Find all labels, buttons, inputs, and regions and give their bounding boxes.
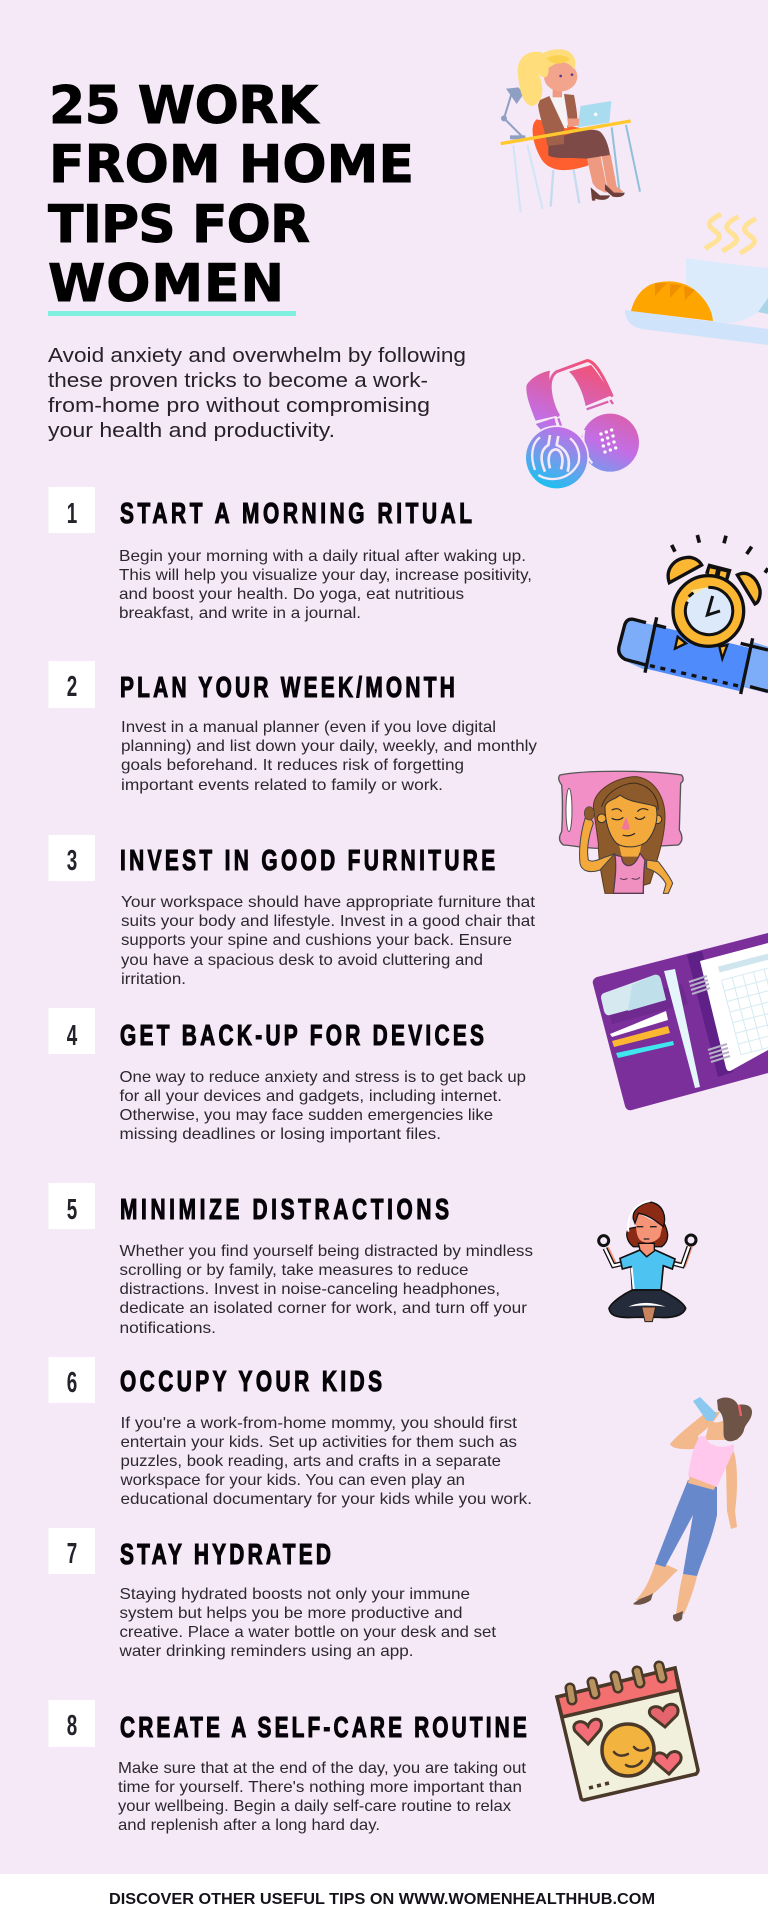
- icon: purple planner: [593, 933, 768, 1110]
- body 2: Invest in a manual planner (even if you love digital: [121, 719, 496, 736]
- number 8: 8: [67, 1710, 77, 1742]
- body 4: missing deadlines or losing important files.: [120, 1126, 441, 1143]
- title: FROM HOME: [49, 135, 414, 195]
- heading 3: INVEST IN GOOD FURNITURE: [120, 845, 495, 877]
- body 6: If you're a work-from-home mommy, you should first: [120, 1415, 518, 1432]
- body 3: suits your body and lifestyle. Invest in a good chair that: [121, 913, 536, 930]
- number box 5: [48, 1183, 95, 1229]
- title: TIPS FOR: [48, 195, 310, 255]
- number box 7: [48, 1528, 95, 1574]
- number 6: 6: [67, 1367, 77, 1399]
- icon: breakfast plate with bread and steaming cup: [625, 214, 768, 345]
- number 3: 3: [67, 845, 77, 877]
- title: [48, 76, 414, 314]
- tip 5: [48, 1183, 533, 1337]
- body 3: irritation.: [121, 971, 186, 988]
- body 5: distractions. Invest in noise-canceling headphones,: [120, 1281, 500, 1298]
- tip 8: [48, 1700, 527, 1834]
- body 6: puzzles, book reading, arts and crafts in a separate: [120, 1453, 501, 1470]
- body 3: [121, 894, 536, 988]
- number 1: 1: [67, 498, 77, 530]
- body 8: your wellbeing. Begin a daily self-care routine to relax: [118, 1798, 511, 1815]
- body 7: creative. Place a water bottle on your desk and set: [120, 1624, 497, 1641]
- footer text: DISCOVER OTHER USEFUL TIPS ON WWW.WOMENHEALTHHUB.COM: [109, 1891, 655, 1908]
- intro text: these proven tricks to become a work-: [48, 369, 428, 392]
- body 5: [120, 1243, 533, 1337]
- icon: woman lying on pillow: [559, 771, 683, 893]
- body 1: and boost your health. Do yoga, eat nutritious: [119, 586, 464, 603]
- number 5: 5: [67, 1194, 77, 1226]
- body 1: breakfast, and write in a journal.: [119, 605, 361, 622]
- body 2: [121, 719, 537, 794]
- tip 7: [48, 1528, 497, 1660]
- body 7: water drinking reminders using an app.: [118, 1643, 414, 1660]
- body 5: scrolling or by family, take measures to reduce: [120, 1262, 469, 1279]
- body 6: [119, 1415, 532, 1508]
- icon: meditating woman: [599, 1201, 696, 1322]
- tip 6: [48, 1357, 532, 1508]
- intro text: your health and productivity.: [48, 419, 335, 442]
- tip 4: [48, 1008, 526, 1143]
- heading 4: GET BACK-UP FOR DEVICES: [120, 1020, 484, 1052]
- body 6: entertain your kids. Set up activities for them such as: [120, 1434, 517, 1451]
- body 8: time for yourself. There's nothing more important than: [118, 1779, 522, 1796]
- icon: self-care calendar: [557, 1666, 698, 1800]
- body 7: [118, 1586, 497, 1660]
- body 2: goals beforehand. It reduces risk of forgetting: [121, 757, 464, 774]
- tip 1: [48, 487, 532, 622]
- icon: woman working at desk: [501, 49, 640, 212]
- intro text: [48, 344, 466, 442]
- body 7: Staying hydrated boosts not only your immune: [120, 1586, 470, 1603]
- body 2: planning) and list down your daily, weekly, and monthly: [121, 738, 537, 755]
- body 8: and replenish after a long hard day.: [118, 1817, 380, 1834]
- body 4: [120, 1069, 526, 1143]
- title: 25 WORK: [49, 76, 320, 136]
- body 2: important events related to family or work.: [121, 777, 443, 794]
- body 4: One way to reduce anxiety and stress is to get back up: [120, 1069, 526, 1086]
- body 3: supports your spine and cushions your back. Ensure: [121, 932, 512, 949]
- tip 2: [48, 661, 537, 794]
- number box 1: [48, 487, 95, 533]
- number box 8: [48, 1700, 95, 1747]
- body 6: educational documentary for your kids while you work.: [120, 1491, 532, 1508]
- intro text: Avoid anxiety and overwhelm by following: [48, 344, 466, 367]
- title underline: [48, 311, 296, 316]
- heading 8: CREATE A SELF-CARE ROUTINE: [120, 1712, 527, 1744]
- body 8: Make sure that at the end of the day, you are taking out: [118, 1760, 527, 1777]
- number box 2: [48, 661, 95, 708]
- number box 3: [48, 835, 95, 881]
- heading 5: MINIMIZE DISTRACTIONS: [120, 1194, 449, 1226]
- body 8: [118, 1760, 527, 1834]
- title: WOMEN: [48, 254, 284, 314]
- body 7: system but helps you be more productive and: [120, 1605, 462, 1622]
- body 5: Whether you find yourself being distracted by mindless: [120, 1243, 533, 1260]
- icon: headphones: [524, 361, 639, 490]
- body 1: [119, 548, 532, 622]
- tip 3: [48, 835, 536, 988]
- footer band: [0, 1874, 768, 1920]
- number 4: 4: [67, 1020, 78, 1052]
- body 1: This will help you visualize your day, increase positivity,: [119, 567, 532, 584]
- number box 6: [48, 1357, 95, 1403]
- heading 2: PLAN YOUR WEEK/MONTH: [120, 672, 455, 704]
- body 4: for all your devices and gadgets, including internet.: [120, 1088, 502, 1105]
- heading 1: START A MORNING RITUAL: [120, 498, 472, 530]
- body 1: Begin your morning with a daily ritual after waking up.: [119, 548, 526, 565]
- number box 4: [48, 1008, 95, 1054]
- body 5: notifications.: [120, 1320, 216, 1337]
- icon: alarm clock on yoga mat: [618, 535, 768, 694]
- heading 7: STAY HYDRATED: [120, 1539, 331, 1571]
- number 7: 7: [67, 1538, 77, 1570]
- number 2: 2: [67, 671, 77, 703]
- body 4: Otherwise, you may face sudden emergencies like: [120, 1107, 493, 1124]
- icon: woman drinking water: [633, 1397, 752, 1622]
- body 3: you have a spacious desk to avoid cluttering and: [121, 952, 483, 969]
- intro text: from-home pro without compromising: [48, 394, 430, 417]
- heading 6: OCCUPY YOUR KIDS: [120, 1366, 382, 1398]
- body 6: workspace for your kids. You can even play an: [119, 1472, 465, 1489]
- body 5: dedicate an isolated corner for work, and turn off your: [120, 1300, 527, 1317]
- body 3: Your workspace should have appropriate furniture that: [121, 894, 536, 911]
